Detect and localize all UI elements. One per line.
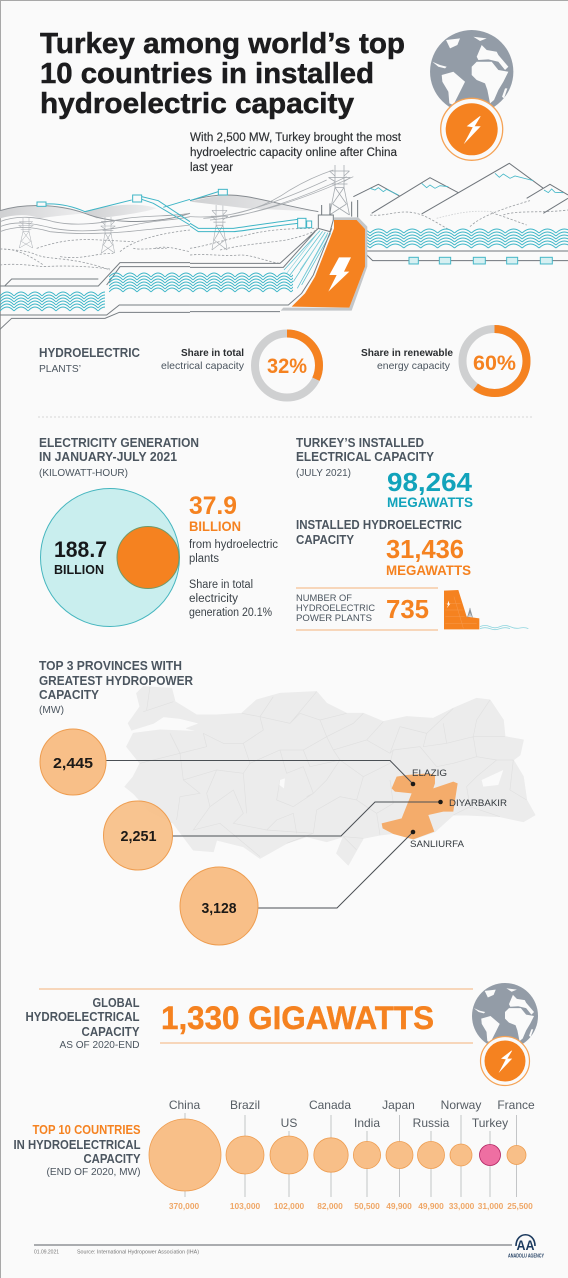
spillway [284,231,331,288]
bubble: Sanliurfa 3,128 [180,867,258,945]
mountains [353,163,568,230]
panel: installed capacity [296,436,528,630]
icon: globe with lightning badge [430,30,513,160]
text: share in renewable: energy capacity [377,360,451,372]
label: global hydroelectrical capacity: AS OF 2020-END [60,1040,140,1051]
footer [34,1235,545,1260]
callout: 37.9 billion: from hydroelectric [189,539,278,551]
stat: 31,436 megawatts [386,534,471,578]
map: Turkey provinces [125,687,535,865]
right reservoir water [366,227,568,249]
panel: hydroelectric plants share [39,329,526,398]
heading: top 3 provinces: (MW) [39,705,64,716]
country labels: Japan [382,1098,415,1112]
footer: Source: International Hydropower Association (IHA) [77,1250,199,1256]
leader lines [106,760,440,908]
country labels: US [281,1116,297,1130]
province labels: SANLIURFA [410,839,465,850]
country labels: France [497,1098,535,1112]
logo: Anadolu Agency: ANADOLU AGENCY [508,1254,545,1260]
heading: installed electrical capacity: ELECTRICAL CAPACITY [296,450,435,464]
donut: 60 percent [462,329,526,393]
stat: 1,330 gigawatts: 1,330 GIGAWATTS [161,1000,434,1036]
stat: number of plants: HYDROELECTRIC [296,603,375,614]
country labels: Turkey [472,1116,508,1130]
title [40,28,405,120]
label: global hydroelectrical capacity: GLOBAL [92,996,140,1010]
heading: hydroelectric plants: HYDROELECTRIC [39,346,140,360]
subtitle: hydroelectric capacity online after China [190,147,398,159]
country values: 25,500 [507,1201,533,1211]
chart: nested circles [40,488,180,626]
country values: 49,900 [418,1201,444,1211]
province labels: ELAZIG [412,768,447,779]
heading: electricity generation: IN JANUARY-JULY 2021 [39,450,177,464]
heading: top 3 provinces: GREATEST HYDROPOWER [39,674,193,688]
heading: top 3 provinces [39,659,193,716]
country labels: Canada [309,1098,351,1112]
callout: 37.9 billion [189,492,278,619]
bubble: Elazig 2,445: 2,445 [53,755,93,772]
stat: number of plants: 735 [386,594,429,624]
province labels: DIYARBAKIR [449,798,507,809]
bubble: Elazig 2,445 [40,729,106,795]
label: global hydroelectrical capacity: HYDROELECTRICAL [26,1010,140,1024]
panel: top 10 countries [14,1098,535,1211]
stat: 31,436 megawatts: 31,436 [386,534,464,564]
stat: 98,264 megawatts: MEGAWATTS [387,494,473,510]
heading: installed hydroelectric capacity [296,518,462,547]
country values: 49,900 [386,1201,412,1211]
country values: 50,500 [354,1201,380,1211]
footer: 01.09.2021 [34,1250,59,1256]
heading: top 10 countries [14,1123,141,1178]
country labels: Brazil [230,1098,260,1112]
callout: 37.9 billion: BILLION [189,518,241,534]
text: share in total: Share in total [181,347,244,359]
pylons [19,218,33,248]
panel: global capacity [26,983,538,1086]
country labels: China [169,1098,200,1112]
illustration: hydroelectric dam landscape [0,163,568,329]
heading: installed hydroelectric capacity: INSTALLED HYDROELECTRIC [296,518,462,532]
country values: 103,000 [230,1201,260,1211]
callout: 37.9 billion: electricity [189,593,238,605]
bubble chart [149,1119,526,1191]
stat: 98,264 megawatts [387,467,473,510]
heading: top 3 provinces: CAPACITY [39,688,100,702]
country values: 33,000 [449,1201,475,1211]
callout: 37.9 billion: Share in total [189,579,253,591]
stat: number of plants [296,593,429,624]
donut: 32 percent [255,334,319,398]
center wires and teal line [190,170,358,267]
label: global hydroelectrical capacity: CAPACITY [82,1025,140,1039]
dam with lightning bolt [190,215,367,312]
subtitle [190,132,402,174]
country values: 31,000 [478,1201,504,1211]
heading: top 10 countries: CAPACITY [84,1152,141,1166]
donut: 32 percent: 32% [267,355,307,378]
title: hydroelectric capacity [40,88,354,120]
country labels: Russia [413,1116,450,1130]
country labels [169,1098,535,1130]
callout: 37.9 billion: 37.9 [189,492,237,520]
country labels: Norway [441,1098,481,1112]
icon: globe with lightning badge [472,983,538,1086]
heading: top 10 countries: (END OF 2020, MW) [46,1167,140,1178]
title: 10 countries in installed [40,58,374,90]
text: share in total: electrical capacity [161,360,245,372]
stat: number of plants: NUMBER OF [296,593,352,604]
panel: electricity generation [39,436,278,626]
heading: hydroelectric plants [39,346,140,375]
bubble chart guide lines [185,1113,516,1197]
logo: Anadolu Agency [508,1235,545,1260]
left hills and wires [0,195,190,329]
country values: 370,000 [169,1201,199,1211]
icon: small dam [444,590,528,630]
donut: 60 percent: 60% [473,352,516,375]
subtitle: last year [190,162,233,174]
bubble: Sanliurfa 3,128: 3,128 [202,900,236,917]
panel: top 3 provinces [39,659,535,945]
heading: installed hydroelectric capacity: CAPACITY [296,533,355,547]
stat: number of plants: POWER PLANTS [296,613,372,624]
chart: nested circles: BILLION [54,562,104,577]
text: share in renewable: Share in renewable [361,347,453,359]
bubble: Diyarbakir 2,251 [104,801,172,870]
country values: 82,000 [317,1201,343,1211]
callout: 37.9 billion: plants [189,553,219,565]
heading: electricity generation [39,436,199,479]
heading: installed electrical capacity: (JULY 2021) [296,468,351,479]
middle and left water [109,270,293,295]
label: global hydroelectrical capacity [26,996,140,1051]
callout: 37.9 billion: generation 20.1% [189,607,272,619]
right canal with valves [365,251,568,264]
title: Turkey among world’s top [40,28,405,60]
subtitle: With 2,500 MW, Turkey brought the most [190,132,402,144]
text: share in renewable [361,347,453,372]
stat: 98,264 megawatts: 98,264 [387,467,473,497]
country values [169,1201,533,1211]
heading: electricity generation: ELECTRICITY GENERATION [39,436,199,450]
country labels: India [354,1116,380,1130]
bubble: Diyarbakir 2,251: 2,251 [120,828,156,845]
province labels [410,768,507,850]
country values: 102,000 [274,1201,304,1211]
heading: top 10 countries: IN HYDROELECTRICAL [14,1138,141,1152]
stat: 31,436 megawatts: MEGAWATTS [386,562,471,578]
heading: installed electrical capacity: TURKEY’S INSTALLED [296,436,424,450]
heading: installed electrical capacity [296,436,435,479]
chart: nested circles: 188.7 [54,537,107,562]
heading: electricity generation: (KILOWATT-HOUR) [39,468,128,479]
heading: hydroelectric plants: PLANTS’ [39,364,81,375]
heading: top 3 provinces: TOP 3 PROVINCES WITH [39,659,182,673]
heading: top 10 countries: TOP 10 COUNTRIES [32,1123,140,1137]
text: share in total [161,347,245,372]
logo: Anadolu Agency: AA [516,1237,534,1253]
